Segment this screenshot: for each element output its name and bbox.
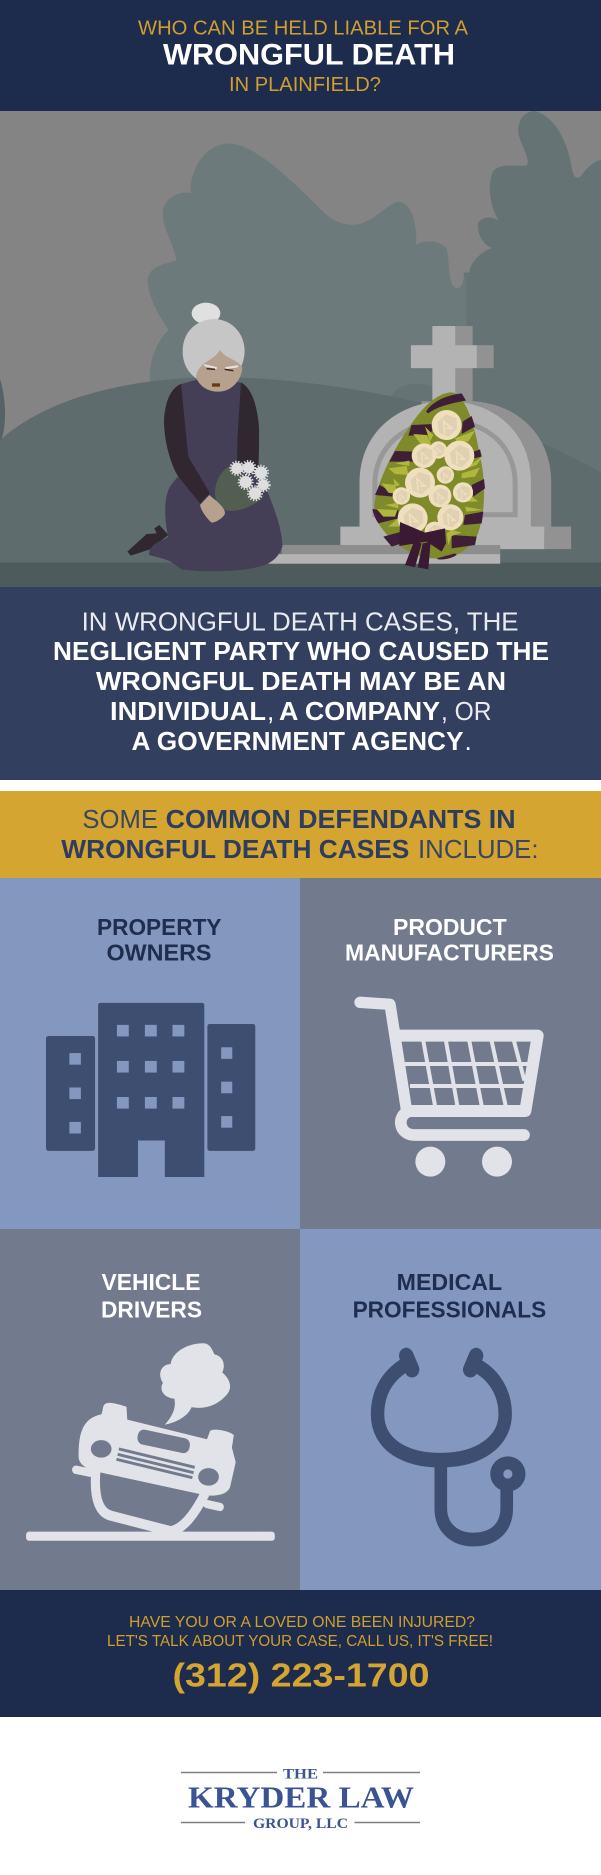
sleeves <box>164 384 210 503</box>
statement text: A COMPANY <box>279 696 440 726</box>
statement text: IN WRONGFUL DEATH CASES, THE <box>82 606 519 636</box>
label: PROPERTY <box>97 914 222 940</box>
heading text: INCLUDE: <box>418 834 538 864</box>
heading text <box>61 804 539 864</box>
heading text: WRONGFUL DEATH CASES <box>61 834 409 864</box>
icon: buildings <box>46 1003 255 1177</box>
phone number: (312) 223-1700 <box>172 1656 430 1694</box>
tombstone <box>268 326 571 564</box>
hair bun <box>192 303 220 324</box>
panel: call to action: LET'S TALK ABOUT YOUR CASE, CALL US, IT'S FREE! <box>107 1633 493 1650</box>
ground <box>0 563 601 587</box>
statement text: NEGLIGENT PARTY WHO CAUSED THE <box>53 636 549 666</box>
tree: left background <box>148 144 466 421</box>
label <box>97 914 222 966</box>
statement text: , OR <box>441 696 492 726</box>
icon: overturned car with smoke <box>26 1343 275 1541</box>
icon: stethoscope <box>378 1356 526 1540</box>
title line 1: WHO CAN BE HELD LIABLE FOR A <box>138 18 469 40</box>
title line 2: WRONGFUL DEATH <box>163 38 455 72</box>
boot <box>127 525 168 556</box>
logo: The Kryder Law Group <box>181 1766 420 1832</box>
panel: product manufacturers <box>300 878 601 1229</box>
flowers <box>231 462 269 499</box>
label <box>101 1269 202 1322</box>
face <box>196 350 242 392</box>
hair <box>183 319 245 379</box>
logo: The Kryder Law Group: KRYDER LAW <box>188 1780 414 1814</box>
label: MEDICAL <box>397 1269 502 1295</box>
dress <box>149 380 282 571</box>
tree: small left edge <box>0 379 5 444</box>
roses <box>393 410 474 542</box>
logo: The Kryder Law Group: GROUP, LLC <box>253 1816 348 1832</box>
panel: title header <box>0 0 601 111</box>
bouquet <box>215 465 263 511</box>
statement text <box>53 606 549 756</box>
logo: The Kryder Law Group: THE <box>283 1766 318 1782</box>
tree: right background <box>464 111 601 475</box>
statement text: . <box>464 726 472 756</box>
panel: medical professionals <box>300 1229 601 1590</box>
woman kneeling <box>127 303 282 571</box>
panel: property owners <box>0 878 300 1229</box>
wreath <box>372 392 485 569</box>
label: DRIVERS <box>101 1296 202 1322</box>
hand <box>200 495 225 523</box>
panel: intro statement <box>0 587 601 780</box>
label: MANUFACTURERS <box>345 940 554 966</box>
label: PRODUCT <box>393 914 507 940</box>
panel: cemetery illustration <box>0 111 601 588</box>
panel: defendants heading <box>0 791 601 879</box>
label: VEHICLE <box>102 1269 200 1295</box>
panel: call to action <box>0 1590 601 1717</box>
label <box>345 914 554 966</box>
ribbon bow <box>399 522 446 569</box>
icon: shopping cart <box>360 1002 538 1177</box>
statement text: WRONGFUL DEATH MAY BE AN <box>96 666 506 696</box>
heading text: COMMON DEFENDANTS IN <box>166 804 516 834</box>
call to action text: HAVE YOU OR A LOVED ONE BEEN INJURED? <box>129 1614 475 1631</box>
label: PROFESSIONALS <box>353 1296 546 1322</box>
label <box>353 1269 546 1322</box>
label: OWNERS <box>106 940 212 966</box>
title line 3: IN PLAINFIELD? <box>229 74 381 96</box>
hill <box>0 377 601 566</box>
panel: vehicle drivers <box>0 1229 300 1590</box>
statement text: A GOVERNMENT AGENCY <box>132 726 464 756</box>
statement text: , <box>267 696 274 726</box>
heading text: SOME <box>82 804 158 834</box>
statement text: INDIVIDUAL <box>110 696 266 726</box>
shrub behind tombstone <box>391 384 433 406</box>
